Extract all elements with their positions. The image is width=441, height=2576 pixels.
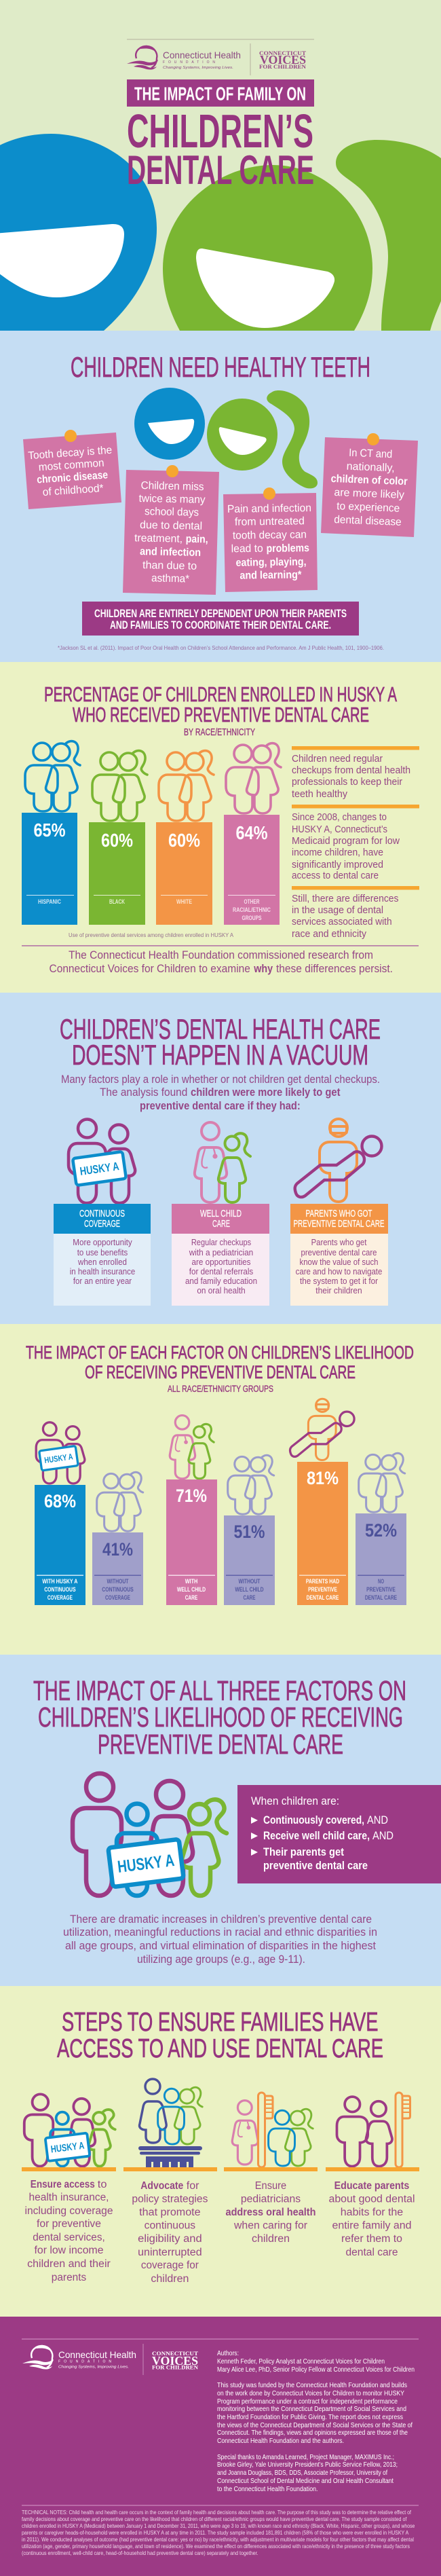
- bar: other groups: GROUPS: [242, 915, 262, 922]
- bar: with continuous coverage 68%: WITH HUSKY A: [42, 1578, 78, 1585]
- text block: regular checkups: professionals to keep their: [292, 777, 402, 788]
- text block: regular checkups: Children need regular: [292, 754, 383, 765]
- step: advocate: eligibility and: [138, 2233, 202, 2245]
- bar: white: [156, 751, 214, 925]
- text block: authors and funding: and Joanna Douglass, BDS, DDS, Associate Professor, University of: [217, 2469, 387, 2477]
- text block: HUSKY A changes: HUSKY A, Connecticut’s: [292, 824, 387, 835]
- step: ensure access: children and their: [27, 2258, 111, 2270]
- step: educate parents: entire family and: [332, 2220, 411, 2231]
- callout: when children are: AND: [367, 1814, 388, 1826]
- text block: HUSKY A changes: significantly improved: [292, 860, 383, 870]
- icon: parents and toothbrush: [337, 2093, 410, 2167]
- bar: with well child care 71%: WELL CHILD: [177, 1586, 206, 1594]
- note: school days: treatment,: [134, 532, 183, 545]
- title: CHILDREN’S: [127, 105, 313, 158]
- note: tooth decay: of childhood*: [42, 483, 104, 498]
- text block: dramatic increases: all age groups, and virtual elimination of disparities in the highest: [65, 1940, 376, 1952]
- panel: percentage by race/ethnicity: [0, 662, 441, 993]
- bar: no preventive care 52%: NO: [378, 1578, 384, 1585]
- technical notes: [22, 2509, 415, 2556]
- text block: regular checkups: checkups from dental health: [292, 765, 410, 776]
- bar: white: WHITE: [176, 898, 192, 906]
- heading: [33, 1675, 406, 1760]
- step: educate parents: Educate parents: [334, 2180, 409, 2192]
- title banner: THE IMPACT OF FAMILY ON: [134, 83, 306, 104]
- panel: impact of all three factors: [0, 1655, 441, 1986]
- factor: well child care: WELL CHILD: [200, 1208, 242, 1219]
- note: pain and infection: lead to: [231, 543, 263, 555]
- text block: authors and funding: Connecticut School of Dental Medicine and Oral Health Consultant: [217, 2477, 394, 2485]
- text block: authors and funding: Connecticut Health Foundation and the authors.: [217, 2437, 344, 2445]
- step: educate parents: habits for the: [341, 2207, 403, 2218]
- icon: doctor, toothbrush and children: [232, 2093, 313, 2167]
- title: [127, 105, 314, 193]
- text block: HUSKY A changes: income children, have: [292, 847, 383, 858]
- factor: well child care: on oral health: [197, 1286, 246, 1295]
- text block: authors and funding: monitoring between the Connecticut Department of Social Services and: [217, 2405, 406, 2413]
- logo: Connecticut Voices for Children: CONNECTICUT: [259, 50, 307, 56]
- title: DENTAL CARE: [127, 147, 314, 193]
- note: school days: Children miss: [140, 480, 204, 493]
- logo: Connecticut Voices for Children: VOICES: [260, 53, 306, 67]
- logo: Connecticut Voices for Children: VOICES: [152, 2354, 198, 2368]
- factor: continuous coverage: [54, 1119, 151, 1306]
- text block: research: these differences persist.: [276, 963, 393, 975]
- bar: without continuous coverage 41%: CONTINUOUS: [102, 1586, 134, 1594]
- panel: impact of each factor: [0, 1324, 441, 1655]
- callout banner: CHILDREN ARE ENTIRELY DEPENDENT UPON THEIR PARENTS: [94, 608, 347, 620]
- intro text: The analysis found: [100, 1086, 187, 1099]
- icon: large green face: [163, 140, 441, 331]
- factor: well child care: [172, 1122, 269, 1306]
- note: school days: twice as many: [138, 493, 206, 506]
- intro text: children were more likely to get: [191, 1086, 341, 1099]
- step: ensure access: dental services,: [33, 2232, 105, 2243]
- logo: Connecticut Health Foundation: [127, 46, 241, 70]
- icon: family with HUSKY A card: HUSKY A: [50, 2141, 85, 2156]
- callout: when children are: AND: [372, 1830, 394, 1842]
- note: school days: school days: [145, 506, 199, 519]
- icon: small faces: [134, 388, 318, 488]
- panel: header: [0, 0, 441, 331]
- text block: HUSKY A changes: Since 2008, changes to: [292, 812, 387, 823]
- step: ensure pediatricians: when caring for: [233, 2220, 307, 2231]
- bar: without continuous coverage 41%: COVERAGE: [105, 1594, 130, 1602]
- bar: parents had preventive care 81%: DENTAL CARE: [307, 1594, 339, 1602]
- intro text: preventive dental care if they had:: [140, 1100, 301, 1112]
- note: pain and infection: Pain and infection: [227, 502, 311, 515]
- logo: Connecticut Health Foundation: FOUNDATION: [58, 2360, 111, 2364]
- text block: authors and funding: on the work done by Connecticut Voices for Children to monitor HUSKY: [217, 2389, 404, 2397]
- bar: with well child care 71%: CARE: [185, 1594, 197, 1602]
- step: ensure pediatricians: pediatricians: [241, 2193, 301, 2205]
- step: advocate: policy strategies: [132, 2193, 208, 2205]
- logo: Connecticut Health Foundation: [22, 2346, 136, 2370]
- text block: differences: race and ethnicity: [292, 929, 367, 940]
- bar: no preventive care 52%: PREVENTIVE: [366, 1586, 396, 1594]
- factor: well child care: and family education: [185, 1276, 257, 1286]
- step: ensure pediatricians: children: [252, 2233, 290, 2245]
- bar: white: 60%: [168, 830, 200, 851]
- bar: without well child care 51%: [224, 1455, 275, 1605]
- note: school days: than due to: [142, 559, 197, 572]
- note: children of color: [321, 433, 418, 537]
- heading: [60, 1013, 381, 1071]
- step: ensure access: [22, 2094, 116, 2283]
- step: ensure access: to: [98, 2179, 107, 2190]
- text block: authors and funding: Program performance under a contract for independent performance: [217, 2397, 398, 2406]
- factor: continuous coverage: More opportunity: [73, 1238, 132, 1247]
- step: ensure access: health insurance,: [28, 2192, 109, 2203]
- note: school days: [123, 465, 219, 595]
- text block: dramatic increases: [63, 1913, 377, 1966]
- note: children of color: to experience: [337, 500, 400, 515]
- step: ensure access: Ensure access: [31, 2179, 95, 2190]
- icon: family with HUSKY A card: [24, 2094, 115, 2167]
- heading: BY RACE/ETHNICITY: [184, 726, 255, 738]
- bar: with continuous coverage 68%: [35, 1422, 85, 1605]
- note: pain and infection: [223, 487, 318, 592]
- step: educate parents: [326, 2093, 419, 2258]
- callout: when children are: Their parents get: [263, 1846, 344, 1858]
- note: tooth decay: chronic disease: [37, 469, 109, 486]
- text block: research: why: [253, 963, 273, 975]
- callout: when children are: When children are:: [251, 1795, 339, 1807]
- chart caption: Use of preventive dental services among children enrolled in HUSKY A: [69, 932, 233, 938]
- step: educate parents: about good dental: [328, 2193, 415, 2205]
- bar: without continuous coverage 41%: [92, 1472, 143, 1605]
- note: school days: and infection: [140, 546, 201, 559]
- text block: research: [49, 949, 393, 975]
- text block: differences: in the usage of dental: [292, 905, 383, 916]
- panel: footer: [0, 2317, 441, 2576]
- text block: HUSKY A changes: Medicaid program for low: [292, 836, 400, 847]
- note: children of color: dental disease: [334, 514, 402, 528]
- text block: authors and funding: Connecticut. The findings, views and opinions expressed are those of the: [217, 2429, 408, 2437]
- bar: black: [89, 751, 147, 925]
- factor: continuous coverage: in health insurance: [70, 1267, 135, 1276]
- factor: parents who got preventive care: their children: [315, 1286, 362, 1295]
- note: pain and infection: tooth decay can: [233, 529, 307, 542]
- bar: black: 60%: [101, 830, 133, 851]
- step: ensure pediatricians: Ensure: [255, 2180, 286, 2192]
- heading: ALL RACE/ETHNICITY GROUPS: [168, 1384, 273, 1394]
- note: children of color: nationally,: [346, 461, 395, 474]
- factor: well child care: with a pediatrician: [189, 1248, 253, 1257]
- factor: parents who got preventive care: the system to get it for: [300, 1276, 378, 1286]
- step: ensure access: parents: [52, 2272, 86, 2283]
- heading: [26, 1342, 414, 1394]
- technical notes: (continuous enrollment, well-child care, head-of-household had preventive dental care) separately and together.: [22, 2550, 258, 2556]
- bar: other groups: [224, 743, 281, 925]
- bar: no preventive care 52%: 52%: [365, 1520, 397, 1541]
- bar: without well child care 51%: WITHOUT: [239, 1578, 261, 1585]
- icon: group on podium: [138, 2079, 202, 2167]
- logo: Connecticut Voices for Children: FOR CHILDREN: [259, 64, 306, 70]
- logo: Connecticut Health Foundation: FOUNDATION: [163, 60, 215, 65]
- bar: with continuous coverage 68%: CONTINUOUS: [44, 1586, 76, 1594]
- text block: dramatic increases: There are dramatic increases in children’s preventive dental care: [70, 1913, 372, 1926]
- factor: continuous coverage: to use benefits: [77, 1248, 128, 1257]
- note: pain and infection: problems: [266, 542, 309, 555]
- heading: [57, 2008, 383, 2063]
- text block: authors and funding: Brooke Girley, Yale University President’s Public Service Fellow, 2013;: [217, 2461, 398, 2469]
- step: ensure access: including coverage: [24, 2205, 113, 2217]
- bar: with well child care 71%: 71%: [176, 1486, 207, 1506]
- logo: Connecticut Voices for Children: CONNECTICUT: [152, 2351, 199, 2357]
- bar: with well child care 71%: [166, 1416, 217, 1605]
- factor: parents who got preventive care: PARENTS WHO GOT: [305, 1208, 372, 1219]
- note: children of color: In CT and: [349, 447, 392, 460]
- panel: steps to ensure access: [0, 1986, 441, 2317]
- icon: doctor and child: [195, 1122, 250, 1202]
- callout: when children are: Receive well child care,: [263, 1830, 370, 1842]
- text block: regular checkups: teeth healthy: [292, 789, 348, 800]
- note: pain and infection: from untreated: [235, 515, 305, 528]
- bar: no preventive care 52%: [356, 1453, 406, 1605]
- callout banner: AND FAMILIES TO COORDINATE THEIR DENTAL CARE.: [110, 619, 331, 631]
- note: school days: pain,: [186, 534, 208, 545]
- step: advocate: Advocate: [140, 2180, 184, 2192]
- note: pain and infection: and learning*: [239, 569, 302, 582]
- logo: Connecticut Health Foundation: Connecticut Health: [163, 50, 241, 60]
- step: advocate: coverage for: [141, 2260, 199, 2271]
- note: pain and infection: eating, playing,: [235, 556, 307, 569]
- factor: parents who got preventive care: Parents who get: [311, 1238, 367, 1247]
- step: educate parents: dental care: [346, 2247, 398, 2258]
- step: educate parents: refer them to: [341, 2233, 402, 2245]
- icon: family with HUSKY A card: HUSKY A: [79, 1160, 120, 1178]
- note: school days: due to dental: [140, 519, 202, 532]
- factor: parents who got preventive care: preventive dental care: [301, 1248, 377, 1257]
- text block: HUSKY A changes: access to dental care: [292, 870, 379, 881]
- text block: authors and funding: Authors:: [217, 2349, 239, 2357]
- panel: doesn't happen in a vacuum: [0, 993, 441, 1324]
- logo: Connecticut Health Foundation: Connecticut Health: [58, 2349, 136, 2360]
- bar: other groups: RACIAL/ETHNIC: [233, 906, 271, 914]
- bar: parents had preventive care 81%: PREVENTIVE: [308, 1586, 337, 1594]
- text block: differences: services associated with: [292, 917, 392, 927]
- bar: without well child care 51%: WELL CHILD: [235, 1586, 264, 1594]
- bar: without continuous coverage 41%: WITHOUT: [107, 1578, 129, 1585]
- icon: large blue face: [0, 134, 157, 331]
- text block: authors and funding: Special thanks to Amanda Learned, Project Manager, MAXIMUS Inc.;: [217, 2453, 394, 2461]
- panel: children need healthy teeth: [0, 331, 441, 662]
- text block: regular checkups: [292, 746, 419, 800]
- intro text: Many factors play a role in whether or not children get dental checkups.: [61, 1073, 380, 1086]
- step: ensure pediatricians: [224, 2093, 318, 2245]
- logo: Connecticut Health Foundation: Changing Systems, Improving Lives.: [163, 66, 233, 70]
- step: advocate: children: [151, 2273, 189, 2285]
- text block: authors and funding: Kenneth Feder, Policy Analyst at Connecticut Voices for Children: [217, 2357, 385, 2366]
- bar: no preventive care 52%: DENTAL CARE: [365, 1594, 397, 1602]
- bar: black: BLACK: [109, 898, 125, 906]
- text block: dramatic increases: utilization, meaningful reductions in racial and ethnic disparities in: [63, 1926, 377, 1938]
- bar: without continuous coverage 41%: 41%: [102, 1539, 133, 1560]
- bar: with continuous coverage 68%: COVERAGE: [47, 1594, 73, 1602]
- heading: [44, 682, 397, 738]
- step: ensure pediatricians: address oral health: [225, 2207, 316, 2218]
- factor: continuous coverage: COVERAGE: [84, 1218, 120, 1230]
- factor: continuous coverage: for an entire year: [73, 1276, 132, 1286]
- factor: well child care: Regular checkups: [191, 1238, 251, 1247]
- footnote: *Jackson SL et al. (2011). Impact of Poor Oral Health on Children’s School Attendance and Performance. Am J Public Health, 101, 1900–1906.: [58, 644, 384, 651]
- text block: authors and funding: This study was funded by the Connecticut Health Foundation and builds: [217, 2381, 407, 2389]
- factor: continuous coverage: CONTINUOUS: [79, 1208, 125, 1219]
- note: tooth decay: [23, 430, 121, 509]
- bar: other groups: 64%: [236, 822, 268, 843]
- text block: authors and funding: the Hartford Foundation for Public Giving. The report does not express: [217, 2413, 403, 2421]
- bar: hispanic: [22, 741, 80, 925]
- logo: Connecticut Voices for Children: FOR CHILDREN: [152, 2364, 198, 2371]
- step: advocate: [123, 2079, 217, 2285]
- step: ensure access: for preventive: [37, 2218, 101, 2230]
- factor: parents who got preventive care: know the value of such: [300, 1257, 379, 1267]
- note: children of color: are more likely: [334, 487, 404, 501]
- factor: well child care: are opportunities: [191, 1257, 251, 1267]
- logo: Connecticut Voices for Children: [152, 2351, 199, 2371]
- bar: hispanic: 65%: [34, 820, 66, 841]
- bar: with well child care 71%: WITH: [185, 1578, 197, 1585]
- icon: dentist and patient: [295, 1119, 381, 1202]
- bar: with continuous coverage 68%: HUSKY A: [44, 1452, 73, 1465]
- bar: without well child care 51%: CARE: [243, 1594, 255, 1602]
- note: tooth decay: most common: [38, 458, 104, 473]
- step: advocate: uninterrupted: [138, 2247, 202, 2258]
- text block: authors and funding: [217, 2349, 415, 2493]
- bar: with continuous coverage 68%: 68%: [44, 1491, 76, 1511]
- bar: without well child care 51%: 51%: [233, 1522, 265, 1542]
- factor: parents who got preventive care: care and how to navigate: [296, 1267, 382, 1276]
- intro text: [61, 1073, 380, 1112]
- note: tooth decay: Tooth decay is the: [28, 445, 113, 462]
- bar: hispanic: HISPANIC: [38, 898, 61, 906]
- text block: differences: [292, 886, 419, 940]
- text block: dramatic increases: utilizing age groups (e.g., age 9-11).: [137, 1953, 305, 1966]
- factor: continuous coverage: when enrolled: [77, 1257, 127, 1267]
- step: advocate: that promote: [139, 2207, 201, 2218]
- text block: differences: Still, there are differences: [292, 894, 399, 904]
- bar: other groups: OTHER: [244, 898, 260, 906]
- bar: parents had preventive care 81%: 81%: [307, 1468, 339, 1488]
- factor: well child care: for dental referrals: [189, 1267, 253, 1276]
- bar: parents had preventive care 81%: [290, 1399, 354, 1605]
- callout: when children are: [237, 1785, 441, 1883]
- text block: research: The Connecticut Health Foundation commissioned research from: [69, 949, 373, 961]
- callout banner: [82, 602, 359, 636]
- icon: family with HUSKY A card: [73, 1773, 227, 1896]
- factor: well child care: CARE: [212, 1218, 230, 1230]
- bar: parents had preventive care 81%: PARENTS HAD: [306, 1578, 339, 1585]
- icon: family with HUSKY A card: HUSKY A: [117, 1851, 176, 1877]
- logo: Connecticut Voices for Children: [259, 50, 307, 70]
- logo: Connecticut Health Foundation: Changing Systems, Improving Lives.: [58, 2366, 129, 2370]
- title banner: [127, 79, 314, 107]
- factor: parents who got preventive care: PREVENTIVE DENTAL CARE: [293, 1218, 384, 1230]
- note: school days: asthma*: [151, 572, 189, 585]
- text block: HUSKY A changes: [292, 805, 419, 881]
- icon: family with HUSKY A card: [69, 1119, 135, 1203]
- step: advocate: for: [187, 2180, 199, 2192]
- note: children of color: children of color: [330, 473, 408, 487]
- text block: authors and funding: to the Connecticut Health Foundation.: [217, 2485, 318, 2493]
- callout: when children are: Continuously covered,: [263, 1814, 364, 1826]
- factor: parents who got preventive care: [290, 1119, 388, 1306]
- step: ensure access: for low income: [34, 2245, 103, 2256]
- step: advocate: continuous: [145, 2220, 195, 2231]
- text block: research: Connecticut Voices for Children to examine: [49, 963, 250, 975]
- callout: when children are: preventive dental care: [263, 1860, 368, 1872]
